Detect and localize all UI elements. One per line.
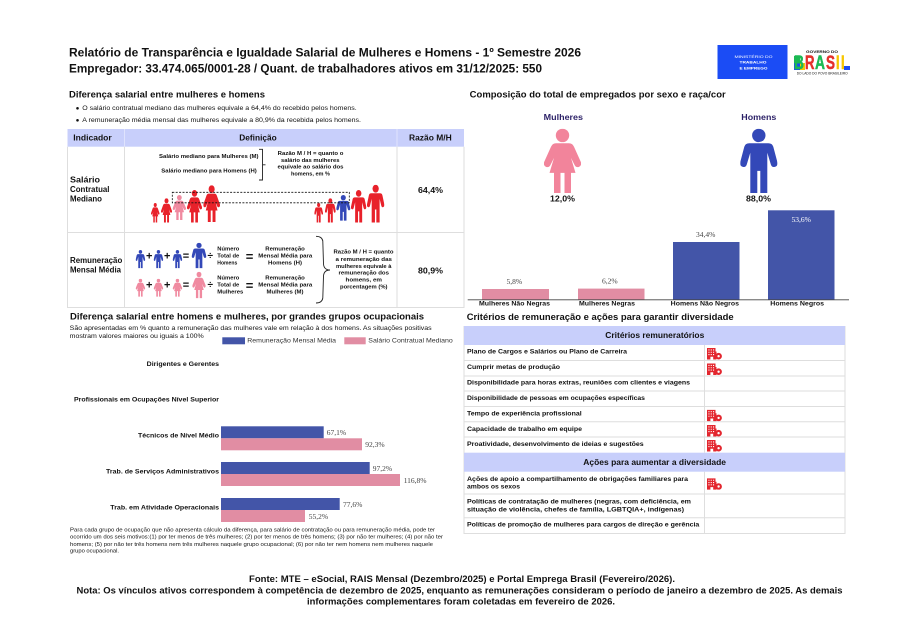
footer: source and note: Fonte: MTE – eSocial, RAIS Mensal (Dezembro/2025) e Portal Emprega Brasil (Fevereiro/2026). [249,574,675,584]
criteria rows: Disponibilidade para horas extras, reuniões com clientes e viagens [467,380,691,386]
criteria rows: Proatividade, desenvolvimento de ideias e sugestões [467,442,644,448]
legend: Salário Contratual Mediano [368,338,453,344]
women median figures [151,185,220,222]
row label: salário contratual mediano: Contratual [70,185,110,194]
logo: Governo do Brasil: GOVERNO DO [806,49,838,54]
average ratio definition text: porcentagem (%) [340,284,388,290]
footnote: grupo ocupacional. [70,549,119,555]
logo: Governo do Brasil: B [794,53,804,74]
women average equation: Total de [217,282,239,288]
column chart: race and sex: 5,8% [506,277,522,286]
men average equation: + [164,250,170,262]
logo: Ministério do Trabalho e Emprego: E EMPREGO [740,66,768,70]
icon: man [740,129,778,193]
women share: 12,0% [550,194,575,204]
legend: Remuneração Mensal Média [247,338,336,344]
bars: atividade operacionais: 77,6% [343,500,362,509]
criteria rows: Disponibilidade de pessoas em ocupações específicas [467,396,646,402]
value: 64,4%: 64,4% [418,185,443,195]
men average equation: Homens (H) [268,261,302,267]
occupational description [70,325,432,340]
logo: Governo do Brasil: R [805,53,815,74]
footer: source and note: Nota: Os vínculos ativos correspondem à competência de dezembro de 2025, enquanto as remunerações consideram o período de janeiro a dezembro de 2025. As demais [76,586,842,596]
men average equation: = [246,249,254,264]
women average equation: Número [217,275,240,281]
women average equation: + [146,280,152,292]
table header [68,129,464,147]
row label: remuneração mensal média [70,256,122,275]
row label: salário contratual mediano [70,176,110,204]
category labels: Trab. em Atividade Operacionais [110,505,220,511]
logo: Governo do Brasil: A [815,53,825,74]
panel: criteria table [464,326,845,534]
women average equation: Mulheres (M) [266,289,304,295]
footer: source and note: informações complementares foram coletadas em fevereiro de 2026. [307,596,615,606]
column chart: race and sex: 6,2% [602,276,618,286]
average ratio definition text: mulheres equivale à [336,264,392,270]
logo: Ministério do Trabalho e Emprego: TRABALHO [740,61,767,65]
logo: Governo do Brasil: DO LADO DO POVO BRASILEIRO [797,72,848,76]
column chart: race and sex [468,210,849,308]
men median figures [314,185,384,222]
title: Empregador: 33.474.065/0001-28 / Quant. de trabalhadores ativos em 31/12/2025: 550 [69,62,542,76]
icon: woman [544,129,581,193]
average ratio definition text: homens, em [346,277,382,283]
heading: occupational groups: Diferença salarial entre homens e mulheres, por grandes grupos ocupacionais [70,312,424,322]
category labels: Técnicos de Nível Médio [138,433,219,439]
title: Relatório de Transparência e Igualdade Salarial de Mulheres e Homens - 1º Semestre 2026 [69,45,581,59]
action rows [467,477,700,529]
men average equation: Número [217,247,240,253]
row label: remuneração mensal média: Mensal Média [70,266,122,275]
ratio definition text: Razão M / H = quanto o [278,151,344,157]
icons: company marks [707,348,722,490]
bars: serviços administrativos: 116,8% [404,476,427,485]
bars: técnicos: 92,3% [365,440,385,449]
men average equation: Homens [217,261,237,267]
heading: critérios: Critérios de remuneração e ações para garantir diversidade [467,312,734,323]
column chart: race and sex: Mulheres Negras [579,302,636,308]
men average equation [136,243,312,268]
women average equation: = [183,280,189,292]
bars: atividade operacionais [221,498,362,522]
median salary labels: Salário mediano para Mulheres (M) [159,154,259,160]
ratio definition text: homens, em % [291,171,330,177]
footer: source and note [76,574,842,606]
women average equation: = [246,278,254,293]
criteria rows: Tempo de experiência profissional [467,411,582,417]
bullet texts: A remuneração média mensal das mulheres equivale a 80,9% da recebida pelos homens. [82,117,361,124]
men share: 88,0% [746,194,771,204]
curly brace [316,236,330,303]
logo: Ministério do Trabalho e Emprego [718,45,788,79]
column chart: race and sex: Homens Negros [770,302,825,308]
bars: técnicos [221,426,385,450]
bars: técnicos: 67,1% [327,428,346,437]
category labels [74,362,220,511]
men share [740,113,778,204]
table header: Indicador [73,134,112,142]
legend [222,337,453,344]
row label: remuneração mensal média: Remuneração [70,256,122,265]
criteria rows: Plano de Cargos e Salários ou Plano de Carreira [467,350,628,356]
average ratio definition text: Razão M / H = quanto [334,250,394,256]
category labels: Profissionais em Ocupações Nível Superior [74,398,220,404]
men average equation: ÷ [208,251,214,262]
logo: Ministério do Trabalho e Emprego: MINISTÉRIO DO [734,54,773,59]
bars: atividade operacionais: 55,2% [309,512,328,521]
header: ações [464,453,845,472]
bars: serviços administrativos: 97,2% [373,464,392,473]
header: ações: Ações para aumentar a diversidade [583,458,727,467]
women share [544,113,584,204]
table header: Definição [239,134,277,142]
bracket [259,149,266,180]
column chart: race and sex: Mulheres Não Negras [479,302,551,308]
bars: serviços administrativos [221,462,427,486]
criteria rows: Cumprir metas de produção [467,365,560,371]
row label: salário contratual mediano: Salário [70,176,100,184]
bar chart: occupational groups [74,362,427,522]
men average equation: Remuneração [265,247,306,253]
action rows: Políticas de contratação de mulheres (negras, com deficiência, em [467,499,691,505]
heading: composição: Composição do total de empregados por sexo e raça/cor [470,89,726,99]
category labels: Dirigentes e Gerentes [147,362,220,368]
footnote: Para cada grupo de ocupação que não apresenta cálculo da diferença, para salário de contratação ou para remuneração média, pode ter [70,527,435,533]
row label: salário contratual mediano: Mediano [70,194,102,204]
action rows: ambos os sexos [467,484,521,490]
occupational description: São apresentadas em % quanto a remuneração das mulheres vale em relação à dos homens. As situações positivas [70,325,432,332]
action rows: Ações de apoio a compartilhamento de obrigações familiares para [467,477,689,483]
logo: Governo do Brasil [794,49,850,76]
action rows: Políticas de promoção de mulheres para cargos de direção e gerência [467,523,700,529]
men average equation: Total de [217,254,239,260]
footnote: homens; (5) por não ter três homens nem três mulheres naquele grupo ocupacional; (6) por não ter nem homens nem mulheres naquele [70,542,433,548]
table header: Razão M/H [409,134,452,142]
men share: Homens [741,113,777,122]
category labels: Trab. de Serviços Administrativos [106,469,220,475]
women average equation: Remuneração [265,275,306,281]
ratio definition text: salário das mulheres [281,158,340,164]
dashed comparison box [172,192,349,203]
women average equation: ÷ [208,280,214,291]
bullet texts: O salário contratual mediano das mulheres equivale a 64,4% do recebido pelos homens. [82,105,357,112]
header: critérios remuneratórios: Critérios remuneratórios [605,331,705,340]
footnote [70,527,443,555]
bullet texts [76,105,361,124]
men average equation: = [183,250,189,262]
panel: indicator table [68,129,464,308]
ratio definition text: equivale ao salário dos [278,165,344,171]
logo: Governo do Brasil: L [841,53,849,74]
women average equation [136,272,312,298]
title [69,45,581,76]
ratio definition text [278,151,344,177]
column chart: race and sex: 53,6% [792,215,811,224]
average ratio definition text: remuneração dos [338,271,389,277]
women average equation: Mensal Média para [258,282,312,288]
logo: Governo do Brasil: I [836,53,840,74]
value: 80,9%: 80,9% [418,266,443,276]
occupational description: mostram valores maiores ou iguais a 100% [70,333,204,340]
median salary labels [159,154,259,175]
action rows: situação de violência, chefes de família, LGBTQIA+, indígenas) [467,508,684,514]
median salary labels: Salário mediano para Homens (H) [161,169,257,175]
criteria rows: Capacidade de trabalho em equipe [467,427,583,433]
women average equation: Mulheres [217,289,243,295]
footnote: ocorrido um dos seis motivos:(1) por ter menos de três mulheres; (2) por ter menos de três homens; (3) por não ter mulheres; (4) por não ter [70,535,443,541]
men average equation: Mensal Média para [258,254,312,260]
men average equation: + [146,250,152,262]
women share: Mulheres [544,113,584,122]
average ratio definition text [334,250,394,290]
logo: Governo do Brasil: S [826,53,835,74]
column chart: race and sex: 34,4% [696,230,715,239]
heading: diferença salarial: Diferença salarial entre mulheres e homens [69,89,265,99]
column chart: race and sex: Homens Não Negros [671,302,740,308]
header: critérios remuneratórios [464,326,845,345]
women average equation: + [164,280,170,292]
criteria rows [467,350,691,448]
average ratio definition text: a remuneração das [336,257,392,263]
